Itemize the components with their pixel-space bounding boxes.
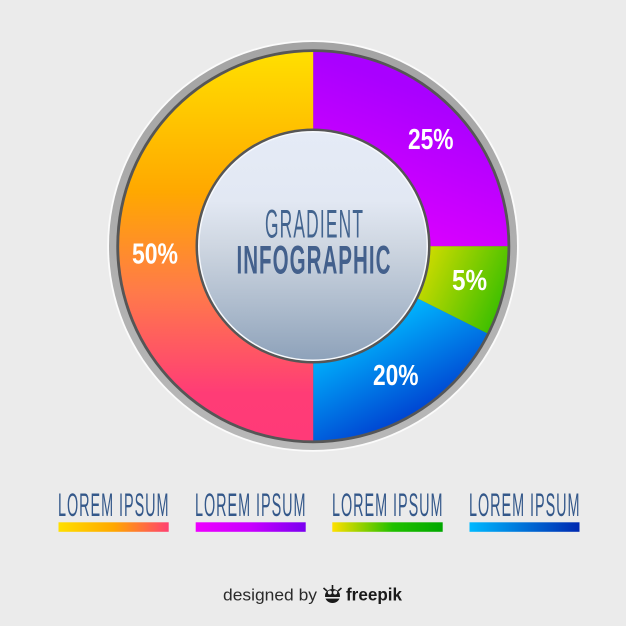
center disc	[196, 128, 430, 364]
label: 50%: 50%	[132, 238, 178, 270]
label: 25%: 25%	[408, 124, 454, 156]
legend item 3: LOREM IPSUM	[332, 489, 443, 524]
credit	[223, 584, 402, 604]
donut chart	[107, 40, 519, 452]
center title: GRADIENT	[265, 202, 363, 246]
legend item 4: LOREM IPSUM	[469, 489, 580, 524]
center title	[236, 202, 390, 282]
segment: 5% green	[313, 246, 508, 333]
legend item 2: LOREM IPSUM	[195, 489, 306, 524]
center title: INFOGRAPHIC	[236, 238, 390, 282]
segment: 50% orange	[119, 52, 313, 440]
credit text: designed by	[223, 586, 318, 604]
label: 20%: 20%	[373, 360, 419, 392]
outer ring	[107, 40, 519, 452]
legend item 1: LOREM IPSUM	[58, 489, 169, 524]
label: 5%: 5%	[452, 265, 487, 297]
icon: freepik bee	[324, 585, 342, 603]
segment: 25% purple	[313, 52, 508, 246]
segment: 20% blue	[313, 246, 487, 440]
freepik wordmark: freepik	[346, 584, 402, 604]
